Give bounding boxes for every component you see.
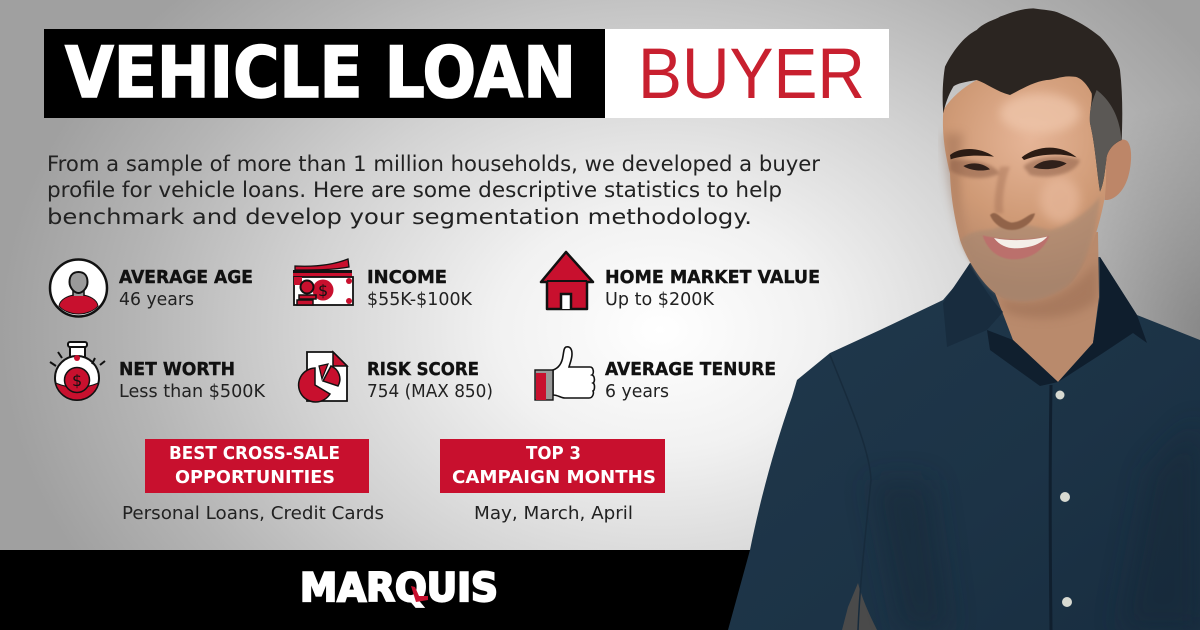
label: average tenure: 6 years [605, 382, 669, 402]
callout: best cross-sale opportunities: BEST CROSS-SALE [169, 444, 340, 464]
nose bridge shading [995, 167, 1010, 213]
label: risk score [367, 359, 493, 402]
label: home market value [605, 267, 820, 310]
label: average tenure: AVERAGE TENURE [605, 359, 776, 380]
face [943, 67, 1106, 301]
eyes [963, 163, 990, 171]
cheek highlight [1040, 177, 1080, 223]
label: income: $55K-$100K [367, 290, 473, 310]
intro paragraph: From a sample of more than 1 million households, we developed a buyer [47, 152, 820, 177]
icon: income: $ [318, 281, 328, 300]
callout: top 3 campaign months: CAMPAIGN MONTHS [452, 468, 656, 488]
hair [943, 8, 1122, 192]
neck [990, 232, 1099, 382]
icon: average age [50, 260, 107, 316]
teeth [994, 237, 1047, 248]
gap between arm and torso [842, 583, 877, 630]
icon: risk score [299, 352, 347, 402]
shirt shading [870, 420, 1200, 630]
label: net worth: Less than $500K [119, 382, 266, 402]
eyebrows [950, 149, 994, 159]
icon: net worth flask: $ [72, 371, 82, 390]
stubble [960, 197, 1100, 301]
callout: best cross-sale opportunities: OPPORTUNITIES [175, 468, 335, 488]
label: average age: 46 years [119, 290, 194, 310]
intro paragraph: benchmark and develop your segmentation methodology. [47, 205, 752, 230]
photo: smiling man in navy shirt [728, 8, 1200, 630]
shirt [728, 257, 1200, 630]
footer bar [0, 550, 1200, 630]
label: average age: AVERAGE AGE [119, 267, 253, 288]
title: VEHICLE LOAN [65, 32, 576, 114]
icon: net worth flask [50, 342, 105, 400]
intro paragraph: profile for vehicle loans. Here are some descriptive statistics to help [47, 178, 782, 203]
head, drawn in zoomed coordinates [943, 8, 1131, 301]
label: net worth: NET WORTH [119, 359, 235, 380]
logo: Marquis: MARQUIS [300, 566, 498, 611]
title [44, 29, 889, 118]
ear [1105, 140, 1131, 200]
greying hair at temple [1090, 90, 1121, 192]
callout: best cross-sale opportunities: Personal Loans, Credit Cards [122, 504, 384, 524]
left shade [943, 133, 970, 260]
title: BUYER [638, 35, 865, 114]
label: home market value: HOME MARKET VALUE [605, 267, 820, 288]
eye sockets [950, 157, 1080, 178]
label: average age [119, 267, 253, 310]
collar right [1058, 257, 1147, 382]
label: home market value: Up to $200K [605, 290, 715, 310]
collar band left [987, 330, 1058, 386]
sleeve seam [830, 355, 871, 630]
icon: home [541, 252, 593, 309]
label: risk score: RISK SCORE [367, 359, 479, 380]
mouth [983, 235, 1049, 259]
forehead highlight [1000, 93, 1080, 133]
label: income [367, 267, 473, 310]
label: income: INCOME [367, 267, 447, 288]
nose [990, 213, 1035, 230]
callout: top 3 campaign months: TOP 3 [526, 444, 581, 464]
label: net worth [119, 359, 266, 402]
intro paragraph [47, 152, 820, 230]
icon: income [293, 259, 353, 305]
callout: top 3 campaign months: May, March, April [474, 504, 633, 524]
shirt buttons [1056, 390, 1072, 607]
callout: best cross-sale opportunities [122, 439, 384, 524]
collar left [943, 263, 1003, 347]
neck shadow [997, 260, 1098, 318]
label: average tenure [605, 359, 776, 402]
placket [1049, 385, 1052, 630]
icon: average tenure thumb [535, 347, 594, 400]
label: risk score: 754 (MAX 850) [367, 382, 493, 402]
callout: top 3 campaign months [440, 439, 665, 524]
